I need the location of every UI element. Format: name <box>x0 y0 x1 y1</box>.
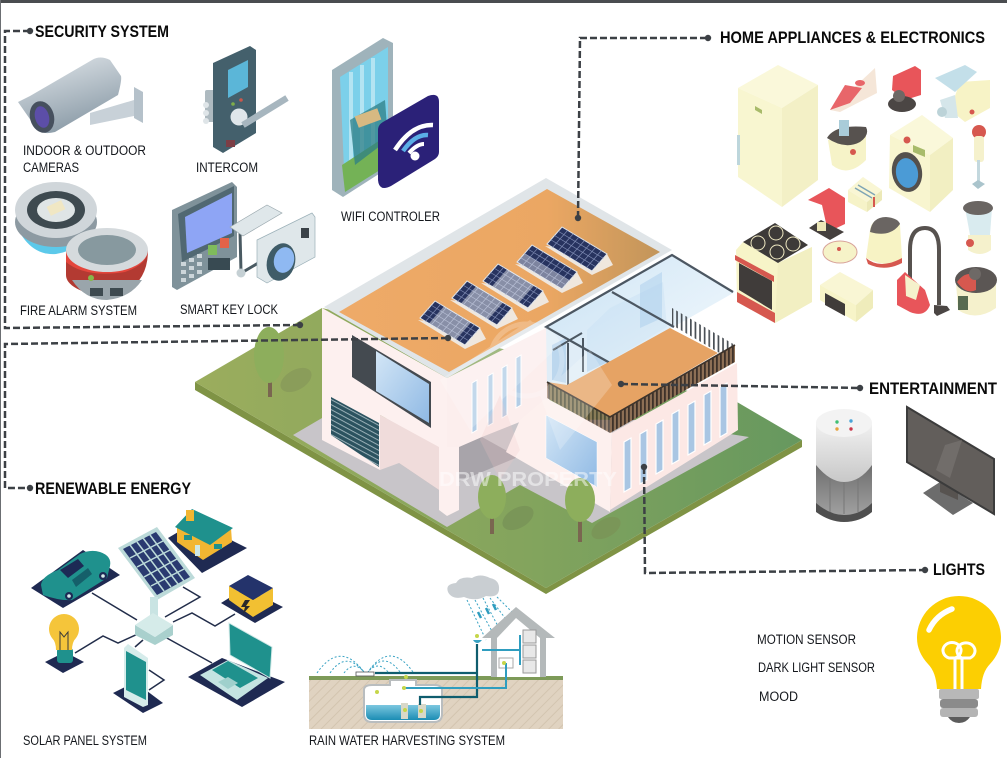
icon: robot vacuum <box>823 241 857 263</box>
label: cameras: INDOOR & OUTDOOR <box>23 143 146 158</box>
icon: flat screen tv <box>907 407 994 515</box>
bulb <box>45 614 84 673</box>
rain <box>467 597 512 640</box>
lower glass wall <box>546 415 597 487</box>
solar panels on roof <box>418 227 613 349</box>
connector: lights <box>641 464 928 573</box>
diagram: rain water harvesting <box>309 576 563 729</box>
connector: home appliances <box>575 35 711 221</box>
rain arrows <box>478 604 496 618</box>
label: fire alarm: FIRE ALARM SYSTEM <box>20 303 137 318</box>
label: motion sensor: MOTION SENSOR <box>757 632 856 647</box>
label: dark light sensor: DARK LIGHT SENSOR <box>758 660 875 675</box>
pipes <box>375 644 477 705</box>
roof with parapet <box>324 178 672 378</box>
tree front right <box>565 478 624 544</box>
icon: light bulb <box>917 596 1001 723</box>
label: solar panel system: SOLAR PANEL SYSTEM <box>23 733 147 748</box>
icon: stick blender <box>972 125 986 189</box>
tablet <box>113 644 163 713</box>
laptop <box>188 623 285 707</box>
label: wifi controller: WIFI CONTROLER <box>341 209 440 224</box>
upper block left face <box>322 308 447 470</box>
lawn base <box>195 308 802 594</box>
watermark logo <box>440 320 612 480</box>
tank <box>364 680 442 722</box>
icon: toaster <box>848 177 882 212</box>
label: intercom: INTERCOM <box>196 160 258 175</box>
house <box>168 509 247 573</box>
recessed ground wall <box>380 415 439 490</box>
junction hub <box>135 613 173 645</box>
label: mood: MOOD <box>759 689 798 704</box>
connector: entertainment <box>618 381 863 391</box>
lower block right face <box>610 363 738 510</box>
narrow windows lower block <box>624 383 727 492</box>
connector: renewable energy <box>5 335 451 491</box>
top edge bar <box>0 0 1007 3</box>
icon: vacuum cleaner <box>897 228 950 316</box>
battery <box>221 575 283 623</box>
icon: security camera <box>18 58 143 136</box>
sprinkler head <box>356 672 374 676</box>
icon: juicer <box>827 120 867 170</box>
cloud <box>447 576 499 599</box>
icon: pressure cooker <box>955 267 997 316</box>
icon: intercom door lock <box>203 46 287 153</box>
icon: blender jar <box>963 201 993 254</box>
lower block left face <box>506 398 612 512</box>
connector: security system <box>5 28 303 328</box>
icon: coffee maker <box>888 66 921 112</box>
appliances group <box>735 65 997 323</box>
paved driveway <box>293 418 749 527</box>
heading: security system: SECURITY SYSTEM <box>35 22 169 41</box>
narrow windows upper block <box>472 355 521 433</box>
soil <box>309 680 563 729</box>
driveway shadow <box>399 437 518 490</box>
heading: renewable energy: RENEWABLE ENERGY <box>35 479 192 498</box>
glass pergola <box>546 255 735 385</box>
gutter house <box>482 607 555 677</box>
watermark text: DRW PROPERTY <box>439 469 618 491</box>
window dark frame and glass <box>352 335 431 428</box>
icon: smart speaker <box>816 409 872 522</box>
diagram: solar panel system <box>31 509 285 713</box>
terrace front railings <box>547 345 735 433</box>
garage door <box>331 397 379 467</box>
label: cameras: CAMERAS <box>23 160 79 175</box>
icon: microwave <box>820 272 873 322</box>
wires <box>75 587 235 690</box>
upper block right face <box>447 328 550 452</box>
car <box>31 550 120 608</box>
icon: iron <box>830 68 877 112</box>
solar array <box>118 527 195 617</box>
sprinkler arcs <box>317 656 413 673</box>
icon: wifi controller phone <box>332 38 439 197</box>
label: rain water harvesting: RAIN WATER HARVESTING SYSTEM <box>309 733 505 748</box>
icon: washing machine <box>889 115 953 212</box>
grass line <box>309 676 563 680</box>
icon: kettle <box>866 217 902 268</box>
sensor markers <box>375 634 506 713</box>
icon: espresso machine <box>808 188 845 240</box>
heading: lights: LIGHTS <box>933 560 985 579</box>
glass room behind terrace <box>546 282 674 385</box>
icon: meat grinder <box>935 65 990 122</box>
icon: fridge <box>737 65 818 207</box>
support pillar <box>439 447 459 516</box>
label: cameras <box>23 143 146 175</box>
icon: fire alarms <box>15 182 148 300</box>
terrace deck <box>547 328 718 417</box>
label: smart key lock: SMART KEY LOCK <box>180 302 278 317</box>
tree left <box>254 327 316 397</box>
terrace rear railing <box>672 308 735 362</box>
icon: smart key lock panel and camera <box>172 182 315 290</box>
tree front left <box>478 475 538 535</box>
icon: electric stove <box>735 223 812 323</box>
left edge line <box>0 0 1 758</box>
isometric smart house <box>195 178 802 594</box>
